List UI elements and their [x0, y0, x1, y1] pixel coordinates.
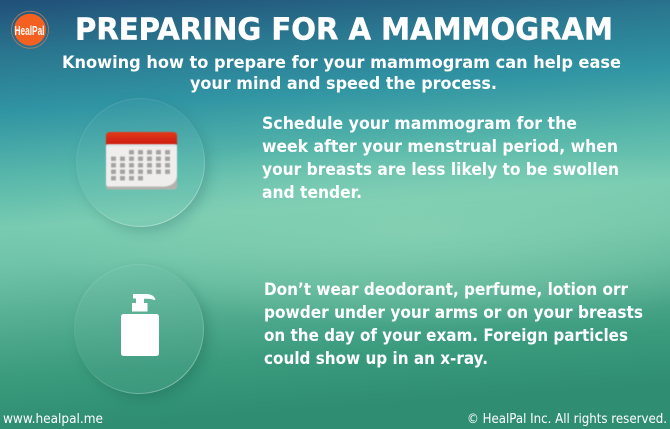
subtitle: your mind and speed the process.: [190, 74, 497, 94]
text block: scheduling advice: your breasts are less likely to be swollen: [262, 160, 619, 180]
text block: deodorant advice: [264, 280, 643, 369]
panel: lotion icon circle: [74, 264, 207, 398]
text block: scheduling advice: [262, 114, 619, 203]
panel: calendar icon circle: [76, 98, 208, 231]
text block: deodorant advice: Don’t wear deodorant, perfume, lotion orr: [264, 280, 629, 300]
footer: website: www.healpal.me: [3, 412, 103, 427]
text block: deodorant advice: on the day of your exam. Foreign particles: [264, 326, 628, 346]
subtitle: Knowing how to prepare for your mammogram can help ease: [62, 53, 621, 73]
title: PREPARING FOR A MAMMOGRAM: [75, 12, 613, 48]
icon: calendar: [106, 132, 177, 190]
text block: scheduling advice: Schedule your mammogram for the: [262, 114, 577, 134]
text block: scheduling advice: week after your menstrual period, when: [262, 137, 618, 157]
text block: scheduling advice: and tender.: [262, 183, 362, 203]
text block: deodorant advice: could show up in an x-ray.: [264, 349, 488, 369]
logo: HealPal: HealPal: [14, 23, 44, 38]
logo: HealPal: [12, 11, 48, 48]
icon: pump bottle: [121, 294, 159, 356]
subtitle: [62, 53, 621, 94]
